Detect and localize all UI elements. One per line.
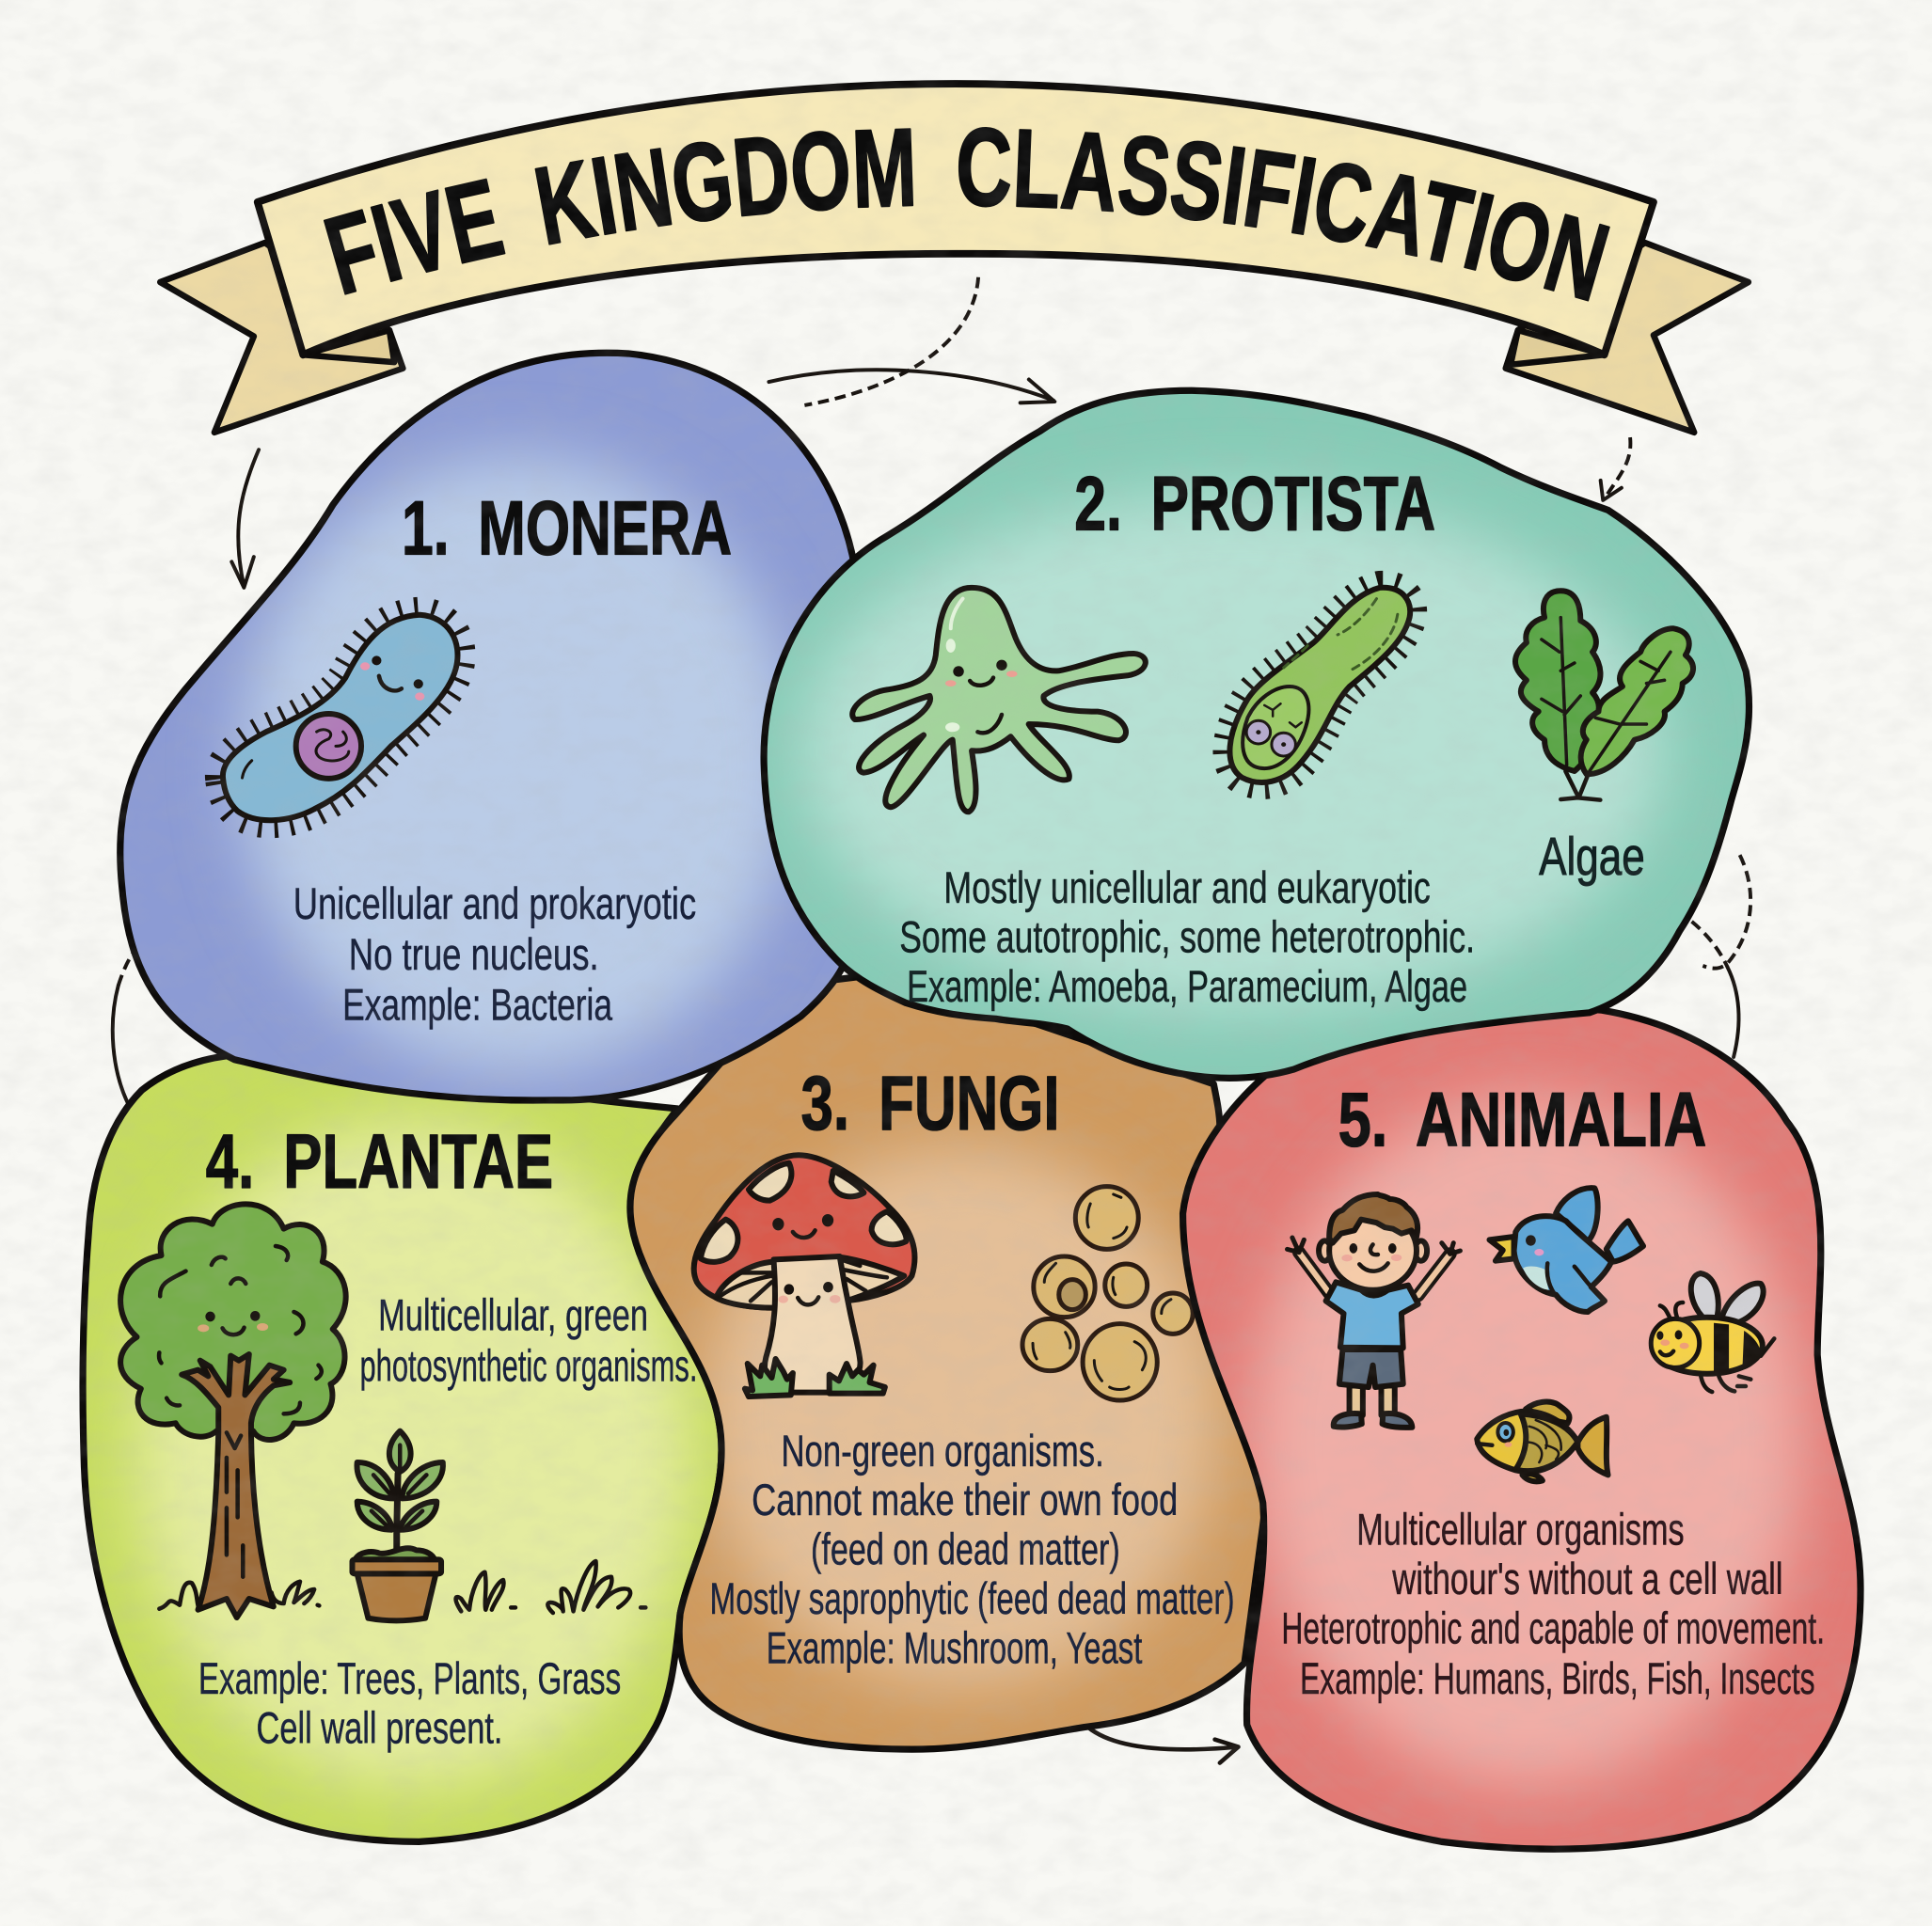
arrow: solid curve from Fungi to Animalia [1088,1728,1238,1763]
icon: bee [1651,1273,1774,1392]
banner band [258,84,1654,355]
panel: 5. Animalia [1180,1008,1864,1853]
text block: Multicellular, green [378,1290,648,1340]
text block [899,862,1475,1011]
text block: Cannot make their own food [752,1475,1178,1524]
icon: fish [1477,1402,1608,1481]
panel: 1. Monera [117,350,856,1104]
panel outline [1183,1009,1861,1849]
icon: yeast cells [1022,1187,1193,1400]
heading: 2. PROTISTA [1074,461,1435,546]
text block: Mostly unicellular and eukaryotic [943,862,1431,912]
title banner [157,80,1751,436]
icon: grass tufts [456,1561,645,1613]
text block [293,878,696,1030]
arrow: link from Protista to Animalia [1692,922,1739,1057]
panel outline [764,390,1749,1078]
panel wash [1186,1014,1857,1846]
text block: Some autotrophic, some heterotrophic. [899,912,1475,962]
panel wash [634,980,1260,1745]
text block: No true nucleus. [349,929,599,979]
icon: tree [120,1204,346,1618]
panel: 4. Plantae [79,1053,719,1845]
arrow: solid curve from Monera to Protista [768,370,1054,403]
text block [198,1653,621,1753]
icon: paramecium [1229,588,1410,782]
label: Algae: Algae [1539,827,1645,886]
heading: 5. ANIMALIA [1338,1077,1706,1162]
icon: boy [1288,1194,1460,1428]
banner left tail [160,243,403,433]
panel: 2. Protista [739,370,1774,1109]
panel: 3. Fungi [626,974,1260,1753]
panel outline [630,973,1269,1749]
text block [710,1426,1235,1672]
icon: potted plant [352,1431,443,1620]
text block: (feed on dead matter) [811,1524,1120,1574]
panel wash [768,393,1746,1075]
text block: withour's without a cell wall [1392,1554,1782,1603]
arrow: dashed curve from banner [804,277,978,405]
panel wash [87,1059,719,1839]
arrow: top-left solid curve into Monera [231,450,259,588]
banner right tail [1506,243,1749,433]
arrow: dashed curve into Protista [1601,437,1630,500]
text block: Unicellular and prokaryotic [293,878,696,928]
arrow: dashed loop at right [1702,855,1750,969]
heading: 3. FUNGI [800,1061,1060,1146]
text block: Mostly saprophytic (feed dead matter) [710,1573,1235,1623]
panel outline [120,353,863,1100]
text block [1281,1505,1825,1703]
text block: Example: Bacteria [342,980,613,1030]
text block: Multicellular organisms [1356,1505,1685,1555]
icon: algae [1515,591,1693,800]
panel wash [123,355,850,1097]
heading: 4. PLANTAE [206,1119,553,1205]
text block: Example: Mushroom, Yeast [767,1622,1142,1672]
icon: amoeba [852,588,1146,812]
text block: photosynthetic organisms. [360,1340,697,1390]
text block: Cell wall present. [256,1703,502,1753]
icon: bacterium [223,615,458,820]
heading: 1. MONERA [402,485,732,571]
icon: bird [1489,1188,1643,1312]
banner folds [303,330,1605,365]
text block: Example: Trees, Plants, Grass [198,1653,621,1703]
text block: Example: Amoeba, Paramecium, Algae [907,961,1467,1011]
icon: mushroom [694,1155,914,1397]
arrow: link from Plantae to Monera [113,946,138,1109]
text block: Non-green organisms. [782,1426,1104,1476]
text block [360,1290,697,1390]
title: FIVE KINGDOM CLASSIFICATION [324,127,1610,301]
panel outline [83,1053,721,1841]
